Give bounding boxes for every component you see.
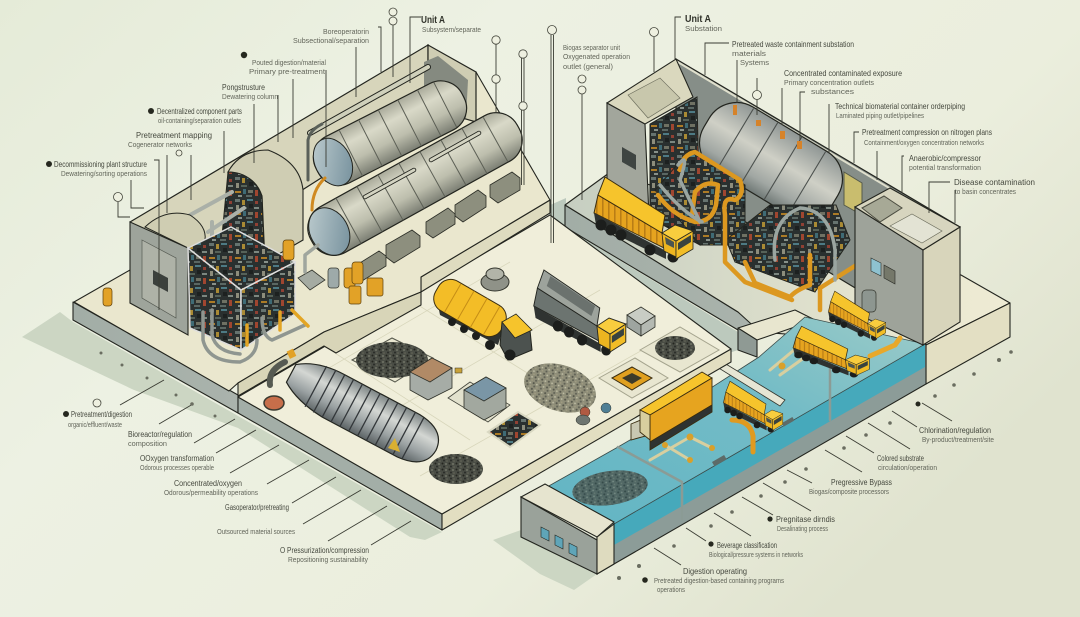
labels: upper left callouts: Decommissioning plant structure [54, 160, 147, 169]
yard front face [238, 397, 442, 530]
block window [153, 270, 168, 292]
yard: shredded waste pile [429, 454, 483, 484]
roof louvre [628, 78, 680, 118]
labels: Unit heading right: Unit A [685, 13, 711, 25]
labels: upper right callouts: Primary concentration outlets [784, 78, 874, 87]
labels: upper left callouts: Cogenerator networks [128, 140, 192, 149]
labels: lower left callouts: Pretreatment/digestion [71, 410, 132, 419]
box windows [541, 527, 577, 557]
box face [521, 497, 597, 574]
labels: lower left callouts [68, 410, 369, 564]
block roof opening [607, 59, 693, 124]
labels: upper right callouts: Oxygenated operation [563, 52, 630, 61]
right block face [855, 207, 923, 345]
yard: small parts [455, 368, 611, 425]
return wall [428, 45, 476, 122]
labels: lower right callouts: Pregnitase dirndis [776, 515, 835, 524]
labels: lower right callouts: Desalinating process [777, 524, 828, 533]
left block face [607, 103, 650, 240]
labels: upper left callouts: Pongstrusture [222, 83, 265, 92]
left block window [622, 147, 636, 170]
partition beam [709, 358, 785, 406]
labels: lower right callouts: operations [657, 585, 685, 594]
orange process pipes [658, 152, 858, 310]
arch interior [222, 172, 264, 258]
loop pipes [203, 310, 305, 362]
drain pipe [732, 420, 753, 452]
machine cage [188, 227, 295, 350]
yard: dump truck [534, 270, 626, 356]
tank support boxes [355, 172, 520, 281]
ground markers [100, 350, 1013, 580]
labels: lower left callouts: Outsourced material sources [217, 527, 295, 536]
left building [103, 45, 531, 362]
yard: large gravel pile [518, 355, 602, 421]
labels: upper right callouts: Biogas separator unit [563, 43, 620, 52]
box corner column [597, 524, 614, 574]
overhead pipes [308, 67, 479, 210]
pipe outlet [870, 338, 900, 356]
labels: upper right callouts: Containment/oxygen concentration networks [864, 138, 984, 147]
labels: upper left callouts: Boreoperatorin [323, 27, 369, 36]
roof panel [890, 214, 942, 243]
labels: lower right callouts [654, 426, 994, 594]
labels: upper left callouts: Decentralized component parts [157, 107, 242, 116]
ground shadows [22, 198, 738, 590]
blue foot [388, 438, 400, 452]
right block end [923, 227, 960, 345]
labels: lower right callouts: Biogas/composite processors [809, 487, 889, 496]
yellow valve pipes [247, 310, 308, 345]
channel teal band [614, 344, 925, 545]
roof nozzles [733, 105, 802, 149]
block machinery [650, 97, 700, 245]
wall panel [844, 172, 862, 215]
labels: Unit heading left: Unit A [421, 14, 445, 26]
labels: lower right callouts: Beverage classification [717, 541, 777, 550]
middle machinery [655, 150, 745, 245]
yard: screw digester [264, 349, 447, 472]
labels: upper left callouts: Pretreatment mapping [136, 131, 212, 140]
platform: left building slab top [74, 72, 550, 396]
right building [594, 59, 960, 345]
labels: Unit heading right [685, 13, 722, 33]
horizontal tank [688, 91, 854, 231]
labels: lower right callouts: Colored substrate [877, 454, 924, 463]
inlet hopper [270, 362, 285, 385]
front control box [521, 484, 614, 574]
labels: upper right callouts: Systems [740, 58, 769, 67]
pipes to arch [190, 192, 244, 255]
block door [142, 240, 176, 318]
yard: concrete cube [627, 307, 655, 336]
truck: yard end [828, 291, 886, 341]
yard: pedestal unit [481, 268, 509, 291]
platform: right building slab [565, 173, 1010, 384]
grey tank [862, 290, 876, 312]
labels: upper left callouts: Dewatering column [222, 92, 278, 101]
labels: upper right callouts: Technical biomaterial container orderpiping [835, 102, 965, 111]
truck: channel far [793, 326, 869, 378]
labels: upper left callouts [54, 27, 369, 178]
truck: channel near [631, 372, 712, 450]
labels: upper right callouts: substances [811, 87, 854, 96]
labels: upper left callouts: oil-containing/separation outlets [158, 116, 241, 125]
labels: lower left callouts: O Pressurization/compression [280, 546, 369, 555]
labels: upper right callouts: Pretreatment compression on nitrogen plans [862, 128, 992, 137]
channel lower wall [597, 344, 926, 574]
labels: Unit heading left [421, 14, 481, 34]
grey cylinder [328, 268, 339, 288]
labels: upper left callouts: Subsectional/separation [293, 36, 369, 45]
yard: mixer truck [429, 274, 532, 360]
box rim [521, 484, 614, 537]
rooftop dome [145, 213, 205, 248]
truck on right slab [594, 177, 693, 262]
slab end face [421, 200, 550, 292]
right block roof [855, 188, 960, 250]
slab step [238, 292, 421, 396]
labels: lower right callouts: By-product/treatment/site [922, 435, 994, 444]
labels: upper right callouts: Concentrated contaminated exposure [784, 69, 902, 78]
labels: upper left callouts: Pouted digestion/material [252, 58, 326, 67]
screw body [280, 352, 447, 472]
labels: upper right callouts: Laminated piping outlet/pipelines [836, 111, 924, 120]
labels: lower left callouts: organic/effluent/waste [68, 420, 122, 429]
wall recess [424, 56, 468, 118]
labels: lower left callouts: Bioreactor/regulation [128, 430, 192, 439]
water surface [547, 317, 925, 524]
labels: upper left callouts: Primary pre-treatment [249, 67, 325, 76]
black bullets [46, 52, 920, 583]
labels: upper right callouts: Anaerobic/compressor [909, 154, 981, 163]
upper tank [305, 73, 475, 193]
platform: middle yard [238, 215, 731, 530]
reactor cage [726, 205, 850, 292]
grey service block [130, 222, 188, 335]
labels: lower left callouts: OOxygen transformation [140, 454, 214, 463]
yard: sorted waste panel [488, 412, 540, 447]
leader lines [118, 17, 955, 565]
roof tray [862, 196, 902, 222]
labels: upper right callouts: outlet (general) [563, 62, 613, 71]
lower tank [299, 104, 531, 264]
labels: lower right callouts: Chlorination/regulation [919, 426, 991, 435]
storage cylinders [103, 240, 383, 306]
pump base [298, 270, 325, 290]
truck: channel middle [723, 381, 783, 432]
labels: lower left callouts: composition [128, 439, 167, 448]
back wall [676, 59, 960, 330]
labels: lower left callouts: Gasoperator/pretreating [225, 503, 289, 512]
red dish [264, 396, 284, 410]
arch housing [228, 150, 303, 262]
labels: upper right callouts: materials [732, 49, 766, 58]
partitions [618, 360, 830, 519]
tank outlet pipe [305, 245, 318, 272]
wall rim [676, 61, 958, 229]
labels: upper right callouts: Pretreated waste containment substation [732, 40, 854, 49]
labels: upper right callouts: Disease contamination [954, 178, 1035, 187]
labels: lower left callouts: Concentrated/oxygen [174, 479, 242, 488]
labels: lower right callouts: Digestion operating [683, 567, 747, 576]
grey process pipes [660, 160, 835, 280]
labels: upper left callouts: Dewatering/sorting operations [61, 169, 147, 178]
yard: dark gravel bed [352, 338, 433, 382]
labels: lower left callouts: Odorous processes operable [140, 463, 214, 472]
block windows [871, 258, 895, 284]
yard side face [442, 349, 731, 530]
callout markers [93, 8, 762, 407]
skimmer arms [650, 345, 815, 460]
labels: lower right callouts: Biological/pressure systems in networks [709, 550, 803, 559]
yard top [238, 215, 731, 514]
yard: waste bins [410, 358, 510, 422]
yard: yellow pit [599, 358, 668, 398]
yard: gravel tile [640, 327, 719, 372]
water channel [547, 317, 926, 574]
labels: lower right callouts: Pretreated digestion-based containing programs [654, 576, 784, 585]
yard inner lines [300, 262, 660, 476]
labels: upper right callouts [563, 40, 1035, 196]
labels: lower right callouts: Pregressive Bypass [831, 478, 892, 487]
side marks [712, 417, 794, 466]
settling gravel [570, 466, 650, 510]
yellow joints [662, 342, 803, 463]
platform: left building slab face [73, 302, 238, 413]
labels: Unit heading left: Subsystem/separate [422, 25, 481, 34]
back wall [130, 45, 428, 290]
yellow hopper tag [287, 349, 296, 359]
labels: lower left callouts: Odorous/permeability operations [164, 488, 258, 497]
labels: upper right callouts: potential transformation [909, 163, 981, 172]
labels: lower right callouts: circulation/operation [878, 463, 937, 472]
labels: lower left callouts: Repositioning sustainability [288, 555, 368, 564]
labels: upper right callouts: to basin concentrates [955, 187, 1016, 196]
labels: Unit heading right: Substation [685, 24, 722, 33]
